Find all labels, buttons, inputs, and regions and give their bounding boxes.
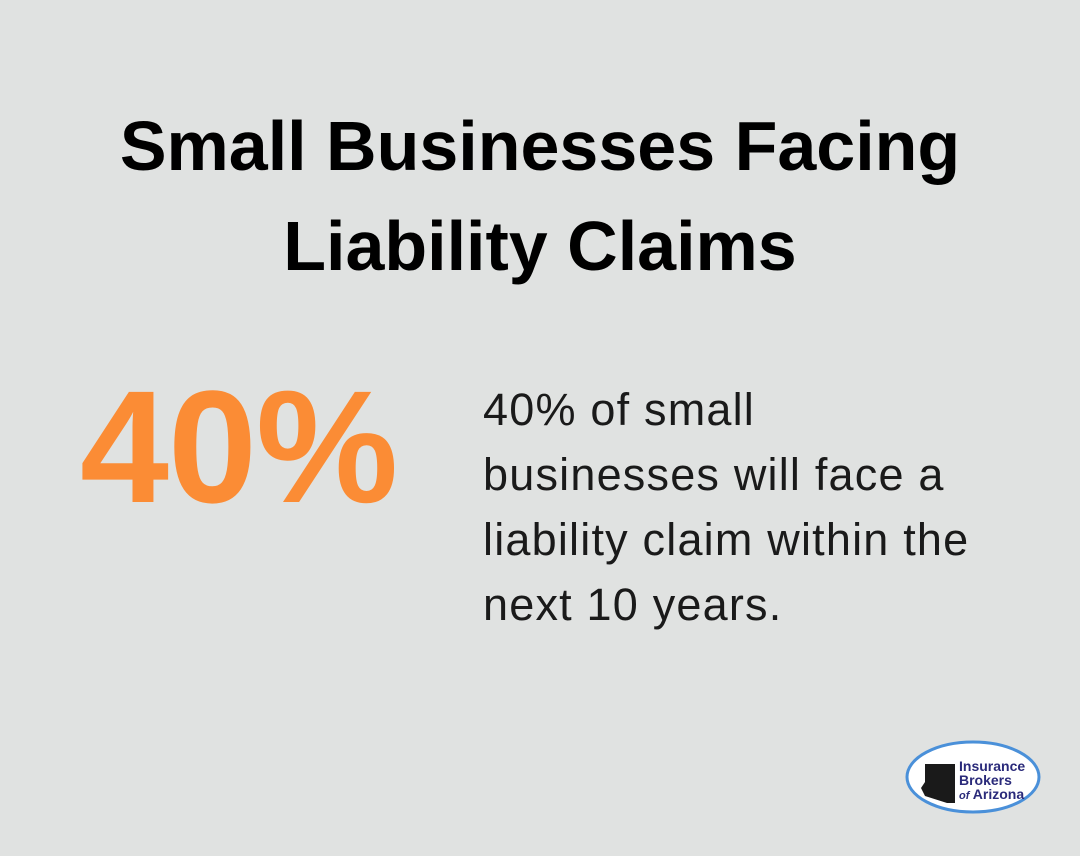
title — [120, 107, 960, 285]
logo: Brokers — [959, 772, 1012, 788]
logo: Insurance — [959, 758, 1025, 774]
description text: businesses will face a — [483, 449, 945, 500]
title: Small Businesses Facing — [120, 107, 960, 185]
description text: liability claim within the — [483, 514, 969, 565]
logo: of Arizona — [959, 786, 1024, 802]
description text — [483, 384, 969, 630]
description text: next 10 years. — [483, 579, 782, 630]
title: Liability Claims — [283, 207, 797, 285]
big stat: 40% — [80, 357, 397, 536]
description text: 40% of small — [483, 384, 755, 435]
logo — [906, 740, 1040, 814]
